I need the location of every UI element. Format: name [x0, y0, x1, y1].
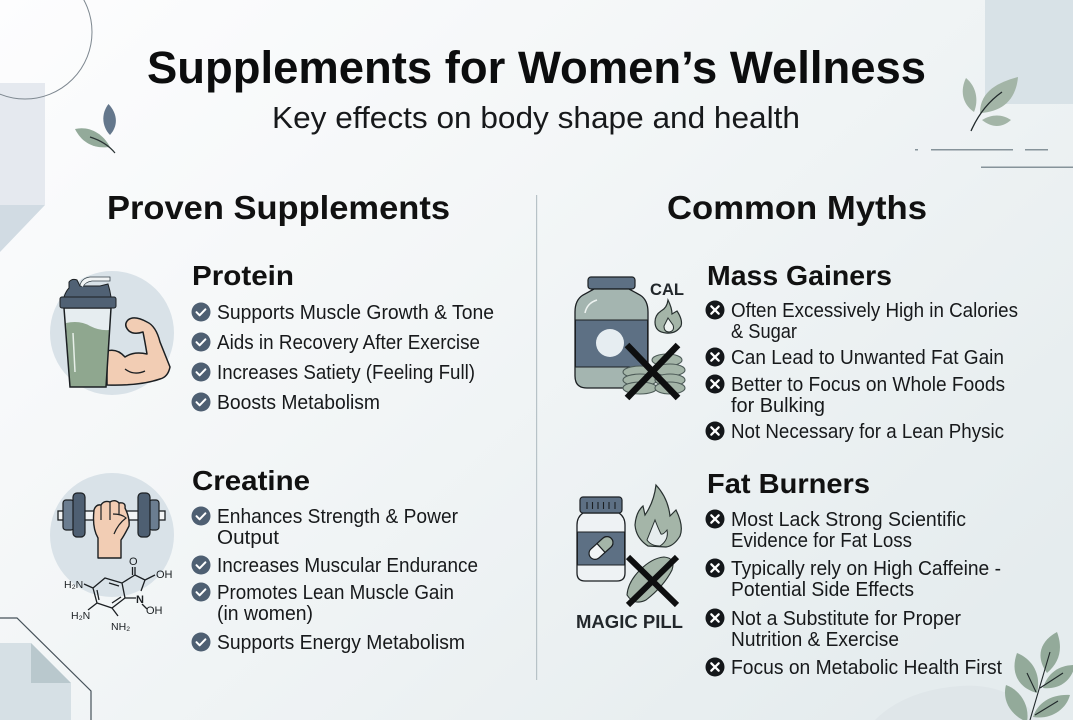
heading: Protein: Protein — [192, 260, 294, 291]
icon: molecule: N — [136, 594, 144, 606]
icon: molecule: OH — [146, 605, 163, 617]
list: mass gainer myths: Not Necessary for a Lean Physic — [731, 421, 1004, 443]
list: creatine benefits: Increases Muscular Endurance — [217, 555, 478, 577]
icon: shaker and flexed arm — [50, 271, 174, 395]
list: creatine benefits: Supports Energy Metabolism — [217, 632, 465, 654]
heading: Creatine: Creatine — [192, 465, 310, 496]
icon: crossed-out pill bottle and flame: MAGIC PILL — [576, 612, 683, 632]
icon: molecule: H₂N — [71, 610, 90, 622]
list: fat burner myths: Nutrition & Exercise — [731, 629, 899, 651]
list: fat burner myths: Not a Substitute for Proper — [731, 608, 961, 630]
heading: Mass Gainers: Mass Gainers — [707, 260, 892, 291]
title: Supplements for Women’s Wellness — [147, 42, 926, 93]
icon: bottom-right leaves — [1005, 632, 1073, 720]
heading: Fat Burners: Fat Burners — [707, 468, 870, 499]
decoration: top-right rule lines — [915, 149, 1073, 168]
list: mass gainer myths: for Bulking — [731, 395, 825, 417]
icon: top-right leaves — [963, 77, 1018, 131]
list: fat burner myths: Focus on Metabolic Health First — [731, 657, 1002, 679]
panel: fat burners — [576, 468, 1002, 679]
list: fat burner myths: Potential Side Effects — [731, 579, 914, 601]
divider — [536, 195, 537, 680]
list: protein benefits: Aids in Recovery After Exercise — [217, 332, 480, 354]
subtitle: Key effects on body shape and health — [272, 100, 800, 135]
icon: crossed-out jar with calories: CAL — [650, 281, 684, 299]
icon: dumbbell and fist — [50, 473, 174, 597]
list: mass gainer myths: & Sugar — [731, 321, 797, 343]
decoration: top-left circle and folded panel — [0, 0, 92, 252]
list: mass gainer myths: Often Excessively High in Calories — [731, 300, 1018, 322]
list: creatine benefits: Output — [217, 527, 279, 549]
decoration: bottom-left folded panel — [0, 618, 91, 720]
icon: molecule: NH₂ — [111, 621, 130, 633]
list: creatine benefits — [192, 506, 478, 654]
heading: Proven Supplements: Proven Supplements — [107, 189, 450, 226]
icon: molecule: O — [129, 556, 138, 568]
list: fat burner myths: Typically rely on High Caffeine - — [731, 558, 1001, 580]
panel: creatine — [50, 465, 478, 654]
list: mass gainer myths: Can Lead to Unwanted Fat Gain — [731, 347, 1004, 369]
panel: mass gainers — [575, 260, 1018, 443]
list: fat burner myths: Evidence for Fat Loss — [731, 530, 912, 552]
heading: Common Myths: Common Myths — [667, 189, 927, 226]
list: protein benefits — [192, 302, 494, 414]
icon: molecule — [64, 556, 173, 633]
decoration: top-right panel — [985, 0, 1073, 104]
list: mass gainer myths — [706, 300, 1018, 443]
icon: crossed-out pill bottle and flame — [576, 485, 683, 632]
icon: crossed-out jar with calories — [575, 277, 685, 398]
list: creatine benefits: Promotes Lean Muscle Gain — [217, 582, 454, 604]
panel: protein — [50, 260, 494, 414]
list: mass gainer myths: Better to Focus on Whole Foods — [731, 374, 1005, 396]
list: protein benefits: Increases Satiety (Feeling Full) — [217, 362, 475, 384]
icon: molecule: H₂N — [64, 579, 83, 591]
list: protein benefits: Boosts Metabolism — [217, 392, 380, 414]
list: fat burner myths: Most Lack Strong Scientific — [731, 509, 966, 531]
icon: top-left leaves — [75, 104, 116, 153]
list: creatine benefits: Enhances Strength & Power — [217, 506, 458, 528]
decoration: bottom-right blob — [875, 686, 1040, 720]
list: creatine benefits: (in women) — [217, 603, 313, 625]
list: protein benefits: Supports Muscle Growth & Tone — [217, 302, 494, 324]
icon: molecule: OH — [156, 569, 173, 581]
list: fat burner myths — [706, 509, 1002, 679]
